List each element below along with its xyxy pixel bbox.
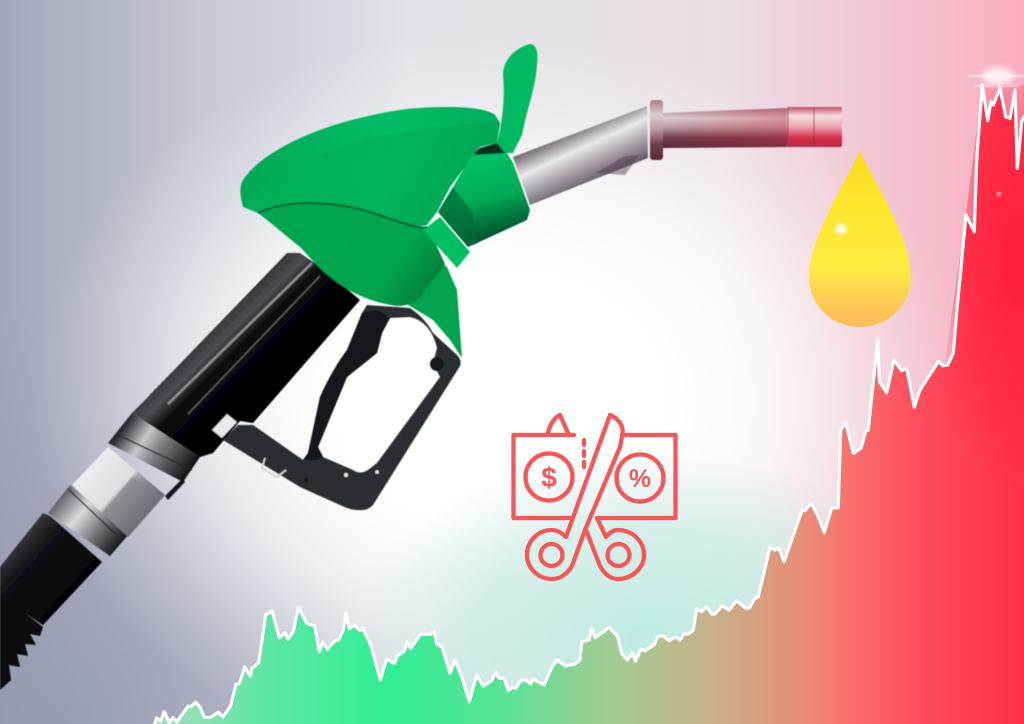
hose [0, 513, 102, 690]
green hood [240, 107, 500, 226]
hood crease line [258, 203, 428, 228]
fuel nozzle [0, 44, 842, 690]
green hood rim [241, 107, 500, 207]
finger holes [540, 544, 562, 566]
upper blade tip [548, 415, 568, 433]
percent coin [616, 454, 664, 502]
green collar band [423, 217, 470, 268]
green fin [405, 255, 462, 358]
price chart: area and white line [155, 85, 1024, 724]
dollar coin: $ [541, 462, 557, 493]
percent coin: % [629, 465, 651, 493]
trigger guard and lever [212, 305, 461, 510]
light flare at chart peak [968, 67, 1024, 196]
dollar coin [526, 454, 572, 500]
green lower shell [258, 203, 445, 306]
fuel drop [809, 150, 911, 327]
main blade and left handle [527, 415, 623, 579]
cut dotted line [582, 440, 586, 469]
metal collars [48, 413, 200, 556]
icon: scissors cutting price tag [514, 415, 676, 579]
metal spout [513, 100, 842, 205]
green neck [438, 153, 530, 247]
right handle [586, 520, 644, 579]
green safety lever [497, 44, 537, 153]
tag outline [514, 435, 676, 518]
black grip with ribbed band [132, 253, 360, 457]
